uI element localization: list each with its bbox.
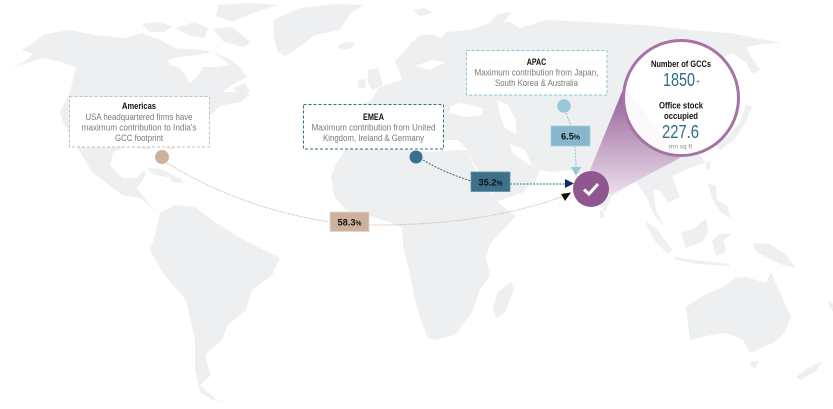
callout: americas: GCC footprint xyxy=(115,133,163,143)
scandinavia xyxy=(395,34,445,74)
stat: number of gccs: 1850 xyxy=(663,70,695,90)
stat: office stock: Office stock xyxy=(659,100,704,112)
callout: emea: Kingdom, Ireland & Germany xyxy=(323,133,424,143)
share label: americas xyxy=(330,212,369,232)
callout: emea xyxy=(304,104,444,149)
india marker with check xyxy=(573,171,609,207)
south america xyxy=(150,205,280,402)
hudson bay xyxy=(168,52,230,83)
australia xyxy=(686,272,791,353)
africa xyxy=(331,136,516,340)
callout: americas xyxy=(70,96,210,147)
new guinea xyxy=(753,243,796,268)
sulawesi xyxy=(712,234,732,256)
callout: emea: EMEA xyxy=(363,112,384,123)
arrow: apac xyxy=(571,167,581,176)
share label: emea: 35.2% xyxy=(478,178,503,188)
stat: number of gccs xyxy=(651,59,711,90)
callout: americas: maximum contribution to India's xyxy=(82,122,197,132)
iceland xyxy=(337,42,355,50)
arrow: americas xyxy=(561,192,571,201)
stat: number of gccs: + xyxy=(696,79,700,86)
callout: emea: Maximum contribution from United xyxy=(312,122,436,132)
canadian arctic islands xyxy=(142,22,172,32)
callout cone xyxy=(590,87,680,195)
arabia xyxy=(466,148,540,201)
borneo xyxy=(681,218,708,248)
white sea and inland water xyxy=(390,38,532,190)
connector: americas xyxy=(167,163,561,225)
callout: americas: Americas xyxy=(122,101,156,112)
eurasia xyxy=(345,20,781,226)
taiwan xyxy=(706,161,711,170)
madagascar xyxy=(493,282,514,318)
stat: office stock xyxy=(659,100,704,150)
new zealand xyxy=(796,361,823,380)
callout: apac: South Korea & Australia xyxy=(495,78,579,88)
marker: emea xyxy=(410,150,422,164)
share label: emea xyxy=(471,172,510,192)
callout: apac xyxy=(466,50,607,95)
tasmania xyxy=(750,361,758,368)
japan xyxy=(716,105,752,150)
share label: americas: 58.3% xyxy=(338,218,362,228)
share label: apac xyxy=(551,126,590,146)
sri lanka xyxy=(600,210,604,218)
connector: apac xyxy=(566,113,576,167)
uk and ireland xyxy=(368,68,383,90)
stat: office stock: mn sq ft xyxy=(669,144,692,150)
callout: apac: Maximum contribution from Japan, xyxy=(474,68,598,78)
arrow: emea xyxy=(565,179,574,188)
callout: americas: USA headquartered firms have xyxy=(86,112,192,122)
india stats circle xyxy=(624,40,738,156)
newfoundland xyxy=(234,83,250,97)
java and lesser sunda xyxy=(673,257,730,266)
marker: apac xyxy=(557,99,571,113)
share label: apac: 6.5% xyxy=(561,132,581,142)
svalbard and novaya zemlya xyxy=(413,8,433,16)
marker: americas xyxy=(155,150,169,164)
stat: number of gccs: Number of GCCs xyxy=(651,59,711,70)
north america xyxy=(9,30,250,213)
cuba and caribbean xyxy=(147,168,180,179)
greenland xyxy=(273,4,363,56)
stat: office stock: 227.6 xyxy=(662,122,699,142)
philippines xyxy=(708,183,730,218)
connector: emea xyxy=(423,160,565,184)
sumatra xyxy=(645,221,672,254)
stat: office stock: occupied xyxy=(664,111,698,122)
callout: apac: APAC xyxy=(527,57,546,68)
